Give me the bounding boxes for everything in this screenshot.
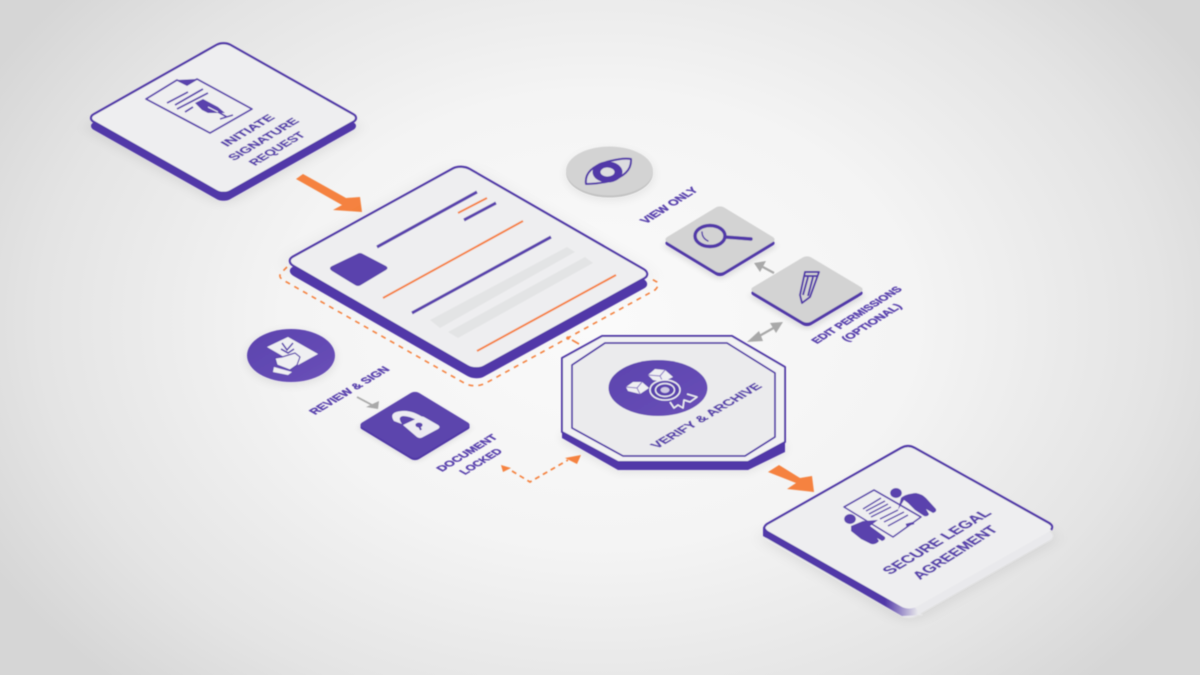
label: document locked: LOCKED [457,447,506,476]
icon: pencil [800,272,819,303]
label: document locked: DOCUMENT [434,433,501,473]
label: secure legal agreement: SECURE LEGAL [879,507,996,577]
panel: document [285,164,652,381]
icon disc: review and sign [247,329,335,384]
panel: pencil tile [749,255,865,330]
document header square [330,253,388,286]
connector: document to verify [566,336,579,344]
panel: secure legal agreement [761,443,1057,622]
panel: initiate signature request [87,41,360,205]
label: edit permissions: (OPTIONAL) [839,302,905,343]
arrow: dashed lock to verify [501,455,581,482]
icon disc: eye [566,146,654,200]
icon: two people with contract [844,488,936,544]
arrow: review to lock [357,397,379,409]
label: initiate signature request: INITIATE [218,112,278,148]
panel: verify and archive octagon [562,336,785,471]
label: view only: VIEW ONLY [637,185,702,225]
arrow: edit to view [754,261,774,273]
arrow: verify to edit, two-way [747,322,783,342]
label: review and sign: REVIEW & SIGN [307,365,393,416]
label: initiate signature request: REQUEST [246,130,309,167]
label: initiate signature request [218,112,309,167]
panel: lock tile [358,390,472,462]
label: initiate signature request: SIGNATURE [225,116,302,162]
icon disc: cubes and rosette [608,360,708,416]
label: secure legal agreement: AGREEMENT [909,523,1003,582]
icon: magnifier [695,226,751,246]
arrow: verify to agreement [768,465,814,492]
panel: magnifier tile [663,205,777,280]
label: edit permissions: EDIT PERMISSIONS [809,285,905,345]
icon: padlock [392,411,440,438]
document lines [377,192,616,351]
dashed outline around document [280,267,658,386]
icon: document with pen nib [146,79,252,133]
label: verify and archive: VERIFY & ARCHIVE [647,381,765,450]
arrow: initiate to document [296,174,362,212]
